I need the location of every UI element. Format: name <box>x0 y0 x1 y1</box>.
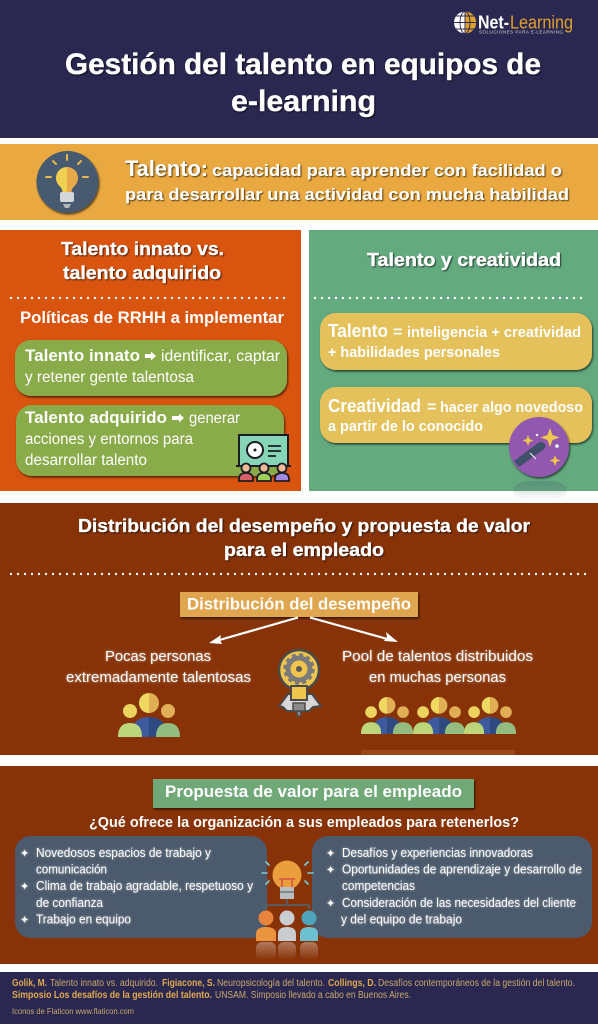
footer: references: Figiacone, S. <box>162 978 215 989</box>
heading <box>61 238 224 283</box>
card: right list: ✦ <box>326 897 335 910</box>
icon: light bulb <box>36 151 98 213</box>
text: pocas personas: extremadamente talentosas <box>66 669 251 686</box>
label: propuesta <box>153 779 474 808</box>
box: talento adquirido: acciones y entornos para <box>25 431 193 448</box>
heading: Talento innato vs. <box>61 238 224 259</box>
box: talento adquirido: Talento adquirido <box>25 408 167 427</box>
card: left list: de confianza <box>36 896 103 910</box>
text: pocas personas <box>66 648 251 686</box>
arrow: right <box>310 618 398 642</box>
card: left list: Trabajo en equipo <box>36 912 131 926</box>
box: talento adquirido: generar <box>189 410 240 427</box>
header band <box>0 0 598 138</box>
card: left list: ✦ <box>20 914 29 926</box>
definition text: para desarrollar una actividad con mucha habilidad <box>125 185 569 204</box>
heading <box>78 515 530 560</box>
logo: Net-Learning: Learning <box>510 12 573 32</box>
footer: references: Neuropsicología del talento. <box>217 978 325 989</box>
box: talento formula <box>320 313 592 370</box>
box: creatividad formula: a partir de lo conocido <box>328 418 483 435</box>
text: pool de talentos: Pool de talentos distribuidos <box>342 648 533 665</box>
definition text: Talento: <box>125 156 208 181</box>
box: talento formula: = <box>393 324 402 341</box>
text: pocas personas: Pocas personas <box>105 648 211 665</box>
card: left list: ✦ <box>20 847 29 860</box>
box: talento formula: + habilidades personales <box>328 344 500 361</box>
arrow: left <box>209 618 298 644</box>
card: right list: ✦ <box>326 847 335 860</box>
logo: Net-Learning: SOLUCIONES PARA E-LEARNING <box>479 30 563 34</box>
card: left list: Novedosos espacios de trabajo y <box>36 846 212 860</box>
box: talento innato <box>15 340 287 396</box>
box: creatividad formula <box>320 387 592 443</box>
box: creatividad formula: Creatividad <box>328 396 421 416</box>
heading: para el empleado <box>224 539 384 560</box>
box: talento innato: Talento innato <box>25 346 140 365</box>
card: left list: ✦ <box>20 880 29 893</box>
footer: references: Talento innato vs. adquirido. <box>50 978 158 989</box>
logo: Net-Learning <box>454 12 573 34</box>
box: talento formula: inteligencia + creatividad <box>407 324 581 341</box>
heading: Distribución del desempeño y propuesta de valor <box>78 515 530 536</box>
box: creatividad formula: = <box>427 399 436 416</box>
card: left list: comunicación <box>36 862 107 876</box>
icon: magic wand <box>509 417 569 500</box>
logo: Net-Learning: Net- <box>478 12 509 32</box>
box: talento adquirido: desarrollar talento <box>25 452 147 469</box>
definition text: capacidad para aprender con facilidad o <box>212 161 562 180</box>
card: right list: competencias <box>342 879 415 893</box>
card: right list: Oportunidades de aprendizaje y desarrollo de <box>342 862 582 876</box>
box: talento formula: Talento <box>328 321 388 341</box>
definition text <box>125 156 569 204</box>
box: talento innato: y retener gente talentosa <box>25 369 194 386</box>
panel: talento innato vs adquirido <box>0 230 301 491</box>
card: right list: Desafíos y experiencias innovadoras <box>342 846 533 860</box>
footer: references: UNSAM. Simposio llevado a cabo en Buenos Aires. <box>215 990 411 1001</box>
footer: references <box>0 972 598 1024</box>
footer: references: Golik, M. <box>12 978 47 989</box>
icon: bulb and team <box>256 860 318 960</box>
label: distribución: Distribución del desempeño <box>187 594 411 614</box>
box: creatividad formula: hacer algo novedoso <box>440 399 583 416</box>
footer: references: Simposio Los desafíos de la gestión del talento. <box>12 990 212 1001</box>
label: propuesta: Propuesta de valor para el empleado <box>165 782 462 801</box>
icon: presentation <box>236 435 291 481</box>
icon: gear bulb <box>279 650 321 716</box>
icon: few people <box>118 693 180 737</box>
card: left list <box>15 836 267 938</box>
box: talento innato: identificar, captar <box>161 348 280 365</box>
panel: propuesta de valor <box>0 766 598 964</box>
heading: talento adquirido <box>63 262 221 283</box>
card: right list <box>312 836 592 938</box>
title <box>65 48 541 118</box>
text: pool de talentos: en muchas personas <box>369 669 506 686</box>
footer: references: Collings, D. <box>328 978 376 989</box>
panel: talento definition <box>0 144 598 220</box>
title: e-learning <box>231 85 376 118</box>
footer: references: Iconos de Flaticon www.flaticon.com <box>12 1006 134 1016</box>
subheading: Políticas de RRHH a implementar <box>20 308 284 327</box>
heading: Talento y creatividad <box>367 249 561 270</box>
panel: distribución del desempeño <box>0 503 598 755</box>
card: right list: y del equipo de trabajo <box>341 912 462 926</box>
card: left list: Clima de trabajo agradable, respetuoso y <box>36 879 254 893</box>
title: Gestión del talento en equipos de <box>65 48 541 81</box>
card: right list: ✦ <box>326 864 335 876</box>
text: pool de talentos <box>342 648 533 686</box>
box: talento adquirido <box>16 405 284 476</box>
card: right list: Consideración de las necesidades del cliente <box>342 896 576 910</box>
icon: many people <box>361 697 516 755</box>
panel: talento y creatividad <box>309 230 598 500</box>
question: ¿Qué ofrece la organización a sus empleados para retenerlos? <box>89 814 519 831</box>
